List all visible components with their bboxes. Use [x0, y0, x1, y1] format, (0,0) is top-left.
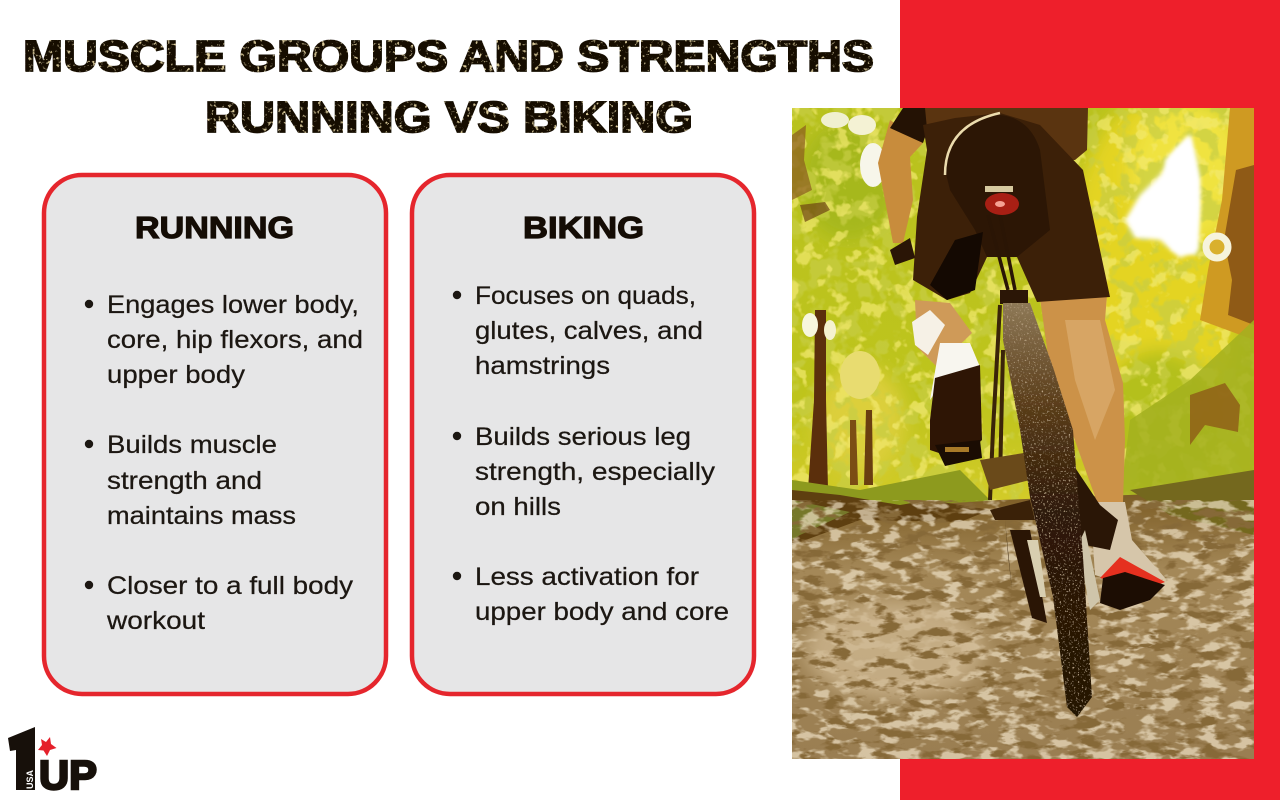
running bullet 2: maintains mass: [107, 502, 296, 530]
lower foliage: [1120, 320, 1254, 500]
biking bullet 2: Builds serious leg: [475, 423, 691, 451]
running heading: RUNNING: [135, 210, 294, 245]
biking bullet 3: upper body and core: [475, 598, 729, 626]
sleeve: [890, 108, 926, 143]
running bullet 1: upper body: [107, 361, 246, 389]
biking card background: [412, 175, 754, 694]
left shoe: [930, 343, 980, 400]
biking bullet 3: Less activation for: [475, 563, 699, 591]
biking bullet 1: Focuses on quads,: [475, 282, 696, 310]
biking bullet 1: hamstrings: [475, 352, 610, 380]
running bullet 1: core, hip flexors, and: [107, 326, 363, 354]
panel: running: [44, 175, 386, 694]
panel: red accent block: [900, 0, 1280, 800]
trail ground: [792, 490, 1254, 759]
biking heading: BIKING: [523, 210, 644, 245]
biking bullet 2: strength, especially: [475, 458, 716, 486]
running bullet 2: Builds muscle: [107, 431, 277, 459]
sun ring on trunk: [1206, 236, 1228, 258]
bike frame and rear light: [980, 186, 1118, 623]
running bullet 2: strength and: [107, 467, 262, 495]
running card background: [44, 175, 386, 694]
running bullet 3: [85, 572, 354, 635]
running bullet 3: workout: [106, 607, 205, 635]
running bullet 3: Closer to a full body: [107, 572, 354, 600]
shorts: [913, 113, 1110, 302]
panel: biking: [412, 175, 754, 694]
biking bullet 3: [453, 563, 729, 626]
logo: 1UP USA: [8, 727, 97, 798]
biking bullet 1: [453, 282, 703, 380]
logo UP: UP: [39, 752, 97, 798]
biking bullet 1: glutes, calves, and: [475, 317, 703, 345]
left leg: [915, 300, 972, 367]
biking bullet 2: on hills: [475, 493, 561, 521]
running bullet 1: [85, 291, 363, 389]
title: [23, 32, 874, 142]
right leg: [1040, 295, 1125, 502]
logo USA: USA: [25, 769, 35, 789]
title: RUNNING VS BIKING: [205, 93, 693, 142]
photo: cyclist on forest trail: [792, 100, 1254, 759]
rear tire: [1003, 303, 1092, 717]
logo numeral 1: [8, 727, 35, 790]
left arm: [878, 120, 923, 243]
logo star: [38, 737, 56, 756]
title: MUSCLE GROUPS AND STRENGTHS: [23, 32, 874, 81]
tree trunks: [1200, 108, 1254, 340]
sunlight patch: [1125, 135, 1200, 258]
jersey / torso top: [925, 108, 1088, 160]
running bullet 1: Engages lower body,: [107, 291, 359, 319]
right shoe: [1093, 502, 1165, 580]
running bullet 2: [85, 431, 296, 530]
biking bullet 2: [453, 423, 716, 521]
